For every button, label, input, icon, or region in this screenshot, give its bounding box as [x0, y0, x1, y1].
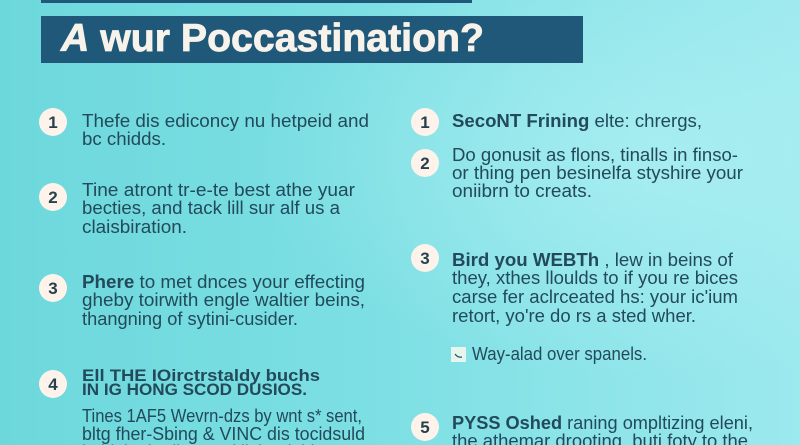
- badge 2: [39, 183, 67, 211]
- badge 4: [39, 370, 67, 398]
- left item 1: [39, 108, 369, 149]
- note text: Way-alad over spanels.: [472, 344, 647, 364]
- heading: Ell THE IOirctrstaldy buchs: [82, 366, 320, 385]
- heading: IN IG HONG SCOD DUSIOS.: [82, 380, 307, 399]
- badge 1: 1: [48, 113, 58, 132]
- text block: [452, 413, 753, 445]
- text block: Bird you WEBTh , lew in beins of: [452, 250, 734, 270]
- icon: check box: [451, 347, 466, 362]
- badge 2: 2: [48, 188, 58, 207]
- left item 2: [39, 180, 355, 237]
- text block: retort, yo're do rs a sted wher.: [452, 306, 696, 326]
- right item 1: [411, 108, 702, 136]
- text block: SecoNT Frining elte: chrergs,: [452, 111, 702, 131]
- badge 4: 4: [48, 375, 58, 394]
- badge 5: [411, 413, 439, 441]
- text block: they, xthes lloulds to if you re bices: [452, 268, 738, 288]
- text block: PYSS Oshed raning ompltizing eleni,: [452, 413, 753, 433]
- text block: gheby toirwith engle waltier beins,: [82, 290, 365, 310]
- badge 1: 1: [420, 113, 430, 132]
- text block: claisbiration.: [82, 217, 187, 237]
- badge 2: 2: [420, 154, 430, 173]
- left item 3: [39, 272, 365, 329]
- title banner: [41, 16, 583, 63]
- text block: Do gonusit as flons, tinalls in finso-: [452, 145, 738, 165]
- text block: [82, 111, 369, 149]
- text block: [82, 180, 355, 237]
- badge 2: [411, 149, 439, 177]
- text block: [82, 272, 365, 329]
- text block: bc chidds.: [82, 129, 166, 149]
- left item 4: [39, 366, 365, 445]
- text block: Thefe dis ediconcy nu hetpeid and: [82, 111, 369, 131]
- text block: [82, 406, 365, 445]
- top banner strip: [41, 0, 472, 3]
- right item 3: [411, 244, 738, 326]
- text block: Tine atront tr-e-te best athe yuar: [82, 180, 355, 200]
- text block: or thing pen besinelfa styshire your: [452, 163, 743, 183]
- heading: [82, 366, 320, 399]
- right item 5: [411, 413, 753, 445]
- badge 3: [411, 244, 439, 272]
- text block: thangning of sytini-cusider.: [82, 309, 298, 329]
- badge 3: 3: [420, 249, 430, 268]
- text block: oniibrn to creats.: [452, 181, 592, 201]
- badge 3: 3: [48, 279, 58, 298]
- badge 1: [39, 108, 67, 136]
- text block: [452, 145, 743, 201]
- text block: carse fer aclrceated hs: your ic'ium: [452, 287, 738, 307]
- right item 2: [411, 145, 743, 201]
- badge 1: [411, 108, 439, 136]
- checklist note: [451, 344, 647, 364]
- badge 3: [39, 274, 67, 302]
- title: A wur Poccastination?: [60, 17, 484, 60]
- text block: becties, and tack lill sur alf us a: [82, 198, 341, 218]
- text block: Phere to met dnces your effecting: [82, 272, 365, 292]
- text block: bltg fher-Sbing & VINC dis tocidsuld: [82, 424, 365, 444]
- text block: Tines 1AF5 Wevrn-dzs by wnt s* sent,: [82, 406, 362, 426]
- badge 5: 5: [420, 418, 430, 437]
- text block: [452, 250, 738, 326]
